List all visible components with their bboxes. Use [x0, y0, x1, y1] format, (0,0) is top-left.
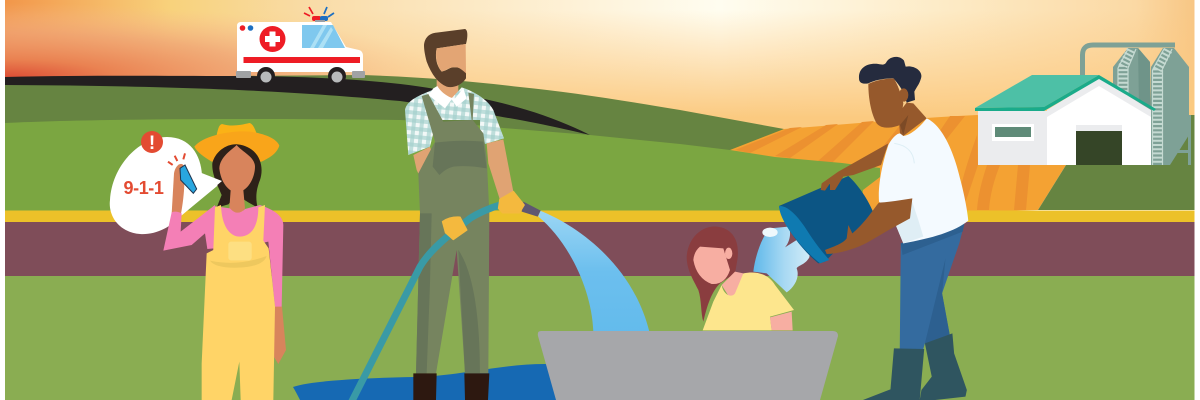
- white t-shirt: [879, 118, 968, 243]
- sky: [5, 0, 1195, 135]
- yellow gloves: [443, 192, 524, 239]
- yellow overalls: [202, 205, 275, 400]
- boots: [413, 373, 489, 400]
- shirt: [703, 272, 794, 330]
- man pouring bucket: upper body: [779, 57, 968, 263]
- raised forearm: [172, 164, 184, 214]
- neck: [722, 272, 743, 298]
- arms: [413, 139, 514, 199]
- yellow road line: [5, 210, 1195, 222]
- man pouring bucket: legs: [863, 223, 967, 400]
- face: [693, 247, 730, 284]
- hose: [352, 205, 500, 400]
- back arm: [821, 143, 888, 191]
- ambulance siren: [304, 7, 334, 23]
- neck shadow: [900, 115, 908, 135]
- phone: [180, 165, 197, 193]
- ambulance: [236, 7, 365, 85]
- orange crop field: [730, 115, 1066, 210]
- light green hill: [5, 119, 880, 212]
- alert icon: !: [149, 133, 155, 154]
- shirt collar: [428, 86, 467, 108]
- ear: [899, 88, 908, 102]
- pants: [900, 223, 964, 349]
- overalls: [416, 93, 489, 373]
- water stream: [538, 211, 649, 332]
- phone ring marks: [168, 153, 185, 165]
- water drop: [762, 228, 778, 237]
- hair: [687, 226, 738, 322]
- lower arm: [274, 306, 286, 364]
- beard and hair: [424, 29, 467, 87]
- stock water trough: [538, 331, 838, 400]
- maroon road: [5, 222, 1195, 276]
- silos: [1082, 45, 1191, 165]
- raised sleeve: [163, 205, 215, 251]
- neck: [898, 103, 927, 136]
- neck: [229, 190, 245, 213]
- foreground grass: [5, 276, 1195, 400]
- hair: [212, 144, 262, 208]
- ear: [725, 248, 732, 259]
- right dark green field: [1038, 115, 1195, 210]
- pink shirt: [213, 205, 283, 307]
- face: [219, 145, 255, 192]
- bucket: [779, 176, 873, 263]
- front arm: [825, 198, 912, 254]
- hair: [859, 57, 921, 103]
- seated woman: [687, 226, 794, 330]
- road: [5, 76, 590, 135]
- man with hose: [352, 29, 649, 400]
- water puddle: [293, 364, 556, 400]
- speech bubble with 9-1-1: [110, 131, 222, 234]
- background dark green hill: [5, 75, 784, 155]
- boots: [863, 333, 967, 400]
- silo ladders: [1158, 50, 1168, 165]
- checked shirt: [405, 87, 504, 155]
- arm: [770, 312, 793, 330]
- neck: [436, 79, 458, 98]
- woman on the phone: [163, 123, 286, 400]
- hose nozzle: [522, 202, 541, 217]
- speech tail: [182, 172, 222, 215]
- water splash from bucket: [753, 227, 810, 292]
- barn: [975, 75, 1156, 165]
- 9-1-1 label: 9-1-1: [123, 178, 164, 198]
- face: [436, 44, 466, 73]
- face: [868, 79, 903, 128]
- straw hat: [194, 123, 279, 162]
